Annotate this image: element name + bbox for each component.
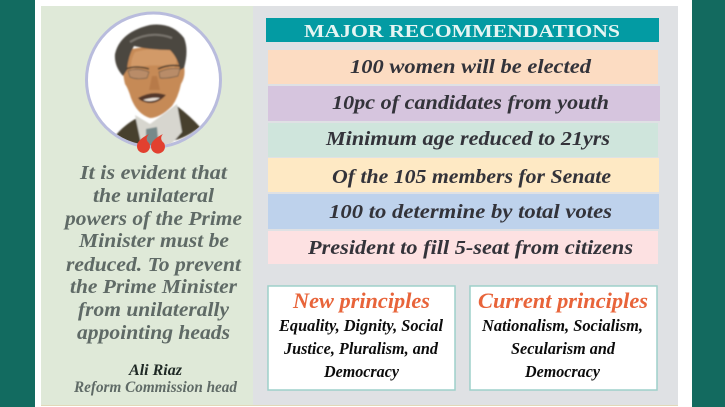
box: new principles: New principles — [292, 288, 430, 313]
quote text: the Prime Minister — [70, 276, 237, 298]
quote text: appointing heads — [77, 322, 230, 344]
right teal band — [692, 0, 725, 407]
quote text: It is evident that — [79, 162, 229, 184]
icon: quotation mark — [137, 134, 165, 154]
box: current principles: Democracy — [524, 362, 601, 381]
box: new principles: Justice, Pluralism, and — [283, 339, 439, 358]
portrait: Ali Riaz — [86, 13, 220, 150]
heading: major recommendations — [266, 18, 659, 42]
quote text: Minister must be — [78, 230, 229, 252]
box: new principles: Equality, Dignity, Social — [278, 316, 443, 335]
quote text: reduced. To prevent — [66, 254, 243, 276]
box: current principles: Nationalism, Socialism, — [481, 316, 643, 335]
quote text: from unilaterally — [78, 299, 229, 321]
row: youth — [268, 86, 660, 121]
left teal band — [0, 0, 35, 407]
row: minimum age: Minimum age reduced to 21yrs — [325, 128, 610, 150]
row: minimum age — [268, 123, 658, 157]
quote text: the unilateral — [93, 185, 214, 207]
box: current principles: Current principles — [478, 288, 648, 313]
quote text — [63, 162, 243, 344]
row: youth: 10pc of candidates from youth — [332, 92, 609, 114]
row: senate: Of the 105 members for Senate — [332, 166, 611, 188]
box: new principles: Democracy — [323, 362, 400, 381]
box: current principles — [470, 286, 657, 390]
row: senate — [268, 158, 659, 192]
attribution: Reform Commission head — [73, 379, 237, 396]
attribution — [73, 362, 237, 396]
row: total votes: 100 to determine by total votes — [329, 201, 612, 223]
row: president — [268, 231, 658, 264]
row: president: President to fill 5-seat from citizens — [307, 237, 633, 259]
heading: major recommendations: MAJOR RECOMMENDATIONS — [304, 21, 620, 41]
row: total votes — [268, 194, 659, 229]
attribution: Ali Riaz — [128, 362, 183, 379]
box: current principles: Secularism and — [511, 339, 616, 358]
quote text: powers of the Prime — [63, 208, 242, 230]
row: women: 100 women will be elected — [350, 56, 592, 78]
box: new principles — [268, 286, 455, 390]
panel: recommendations — [253, 6, 678, 405]
row: women — [268, 50, 658, 84]
